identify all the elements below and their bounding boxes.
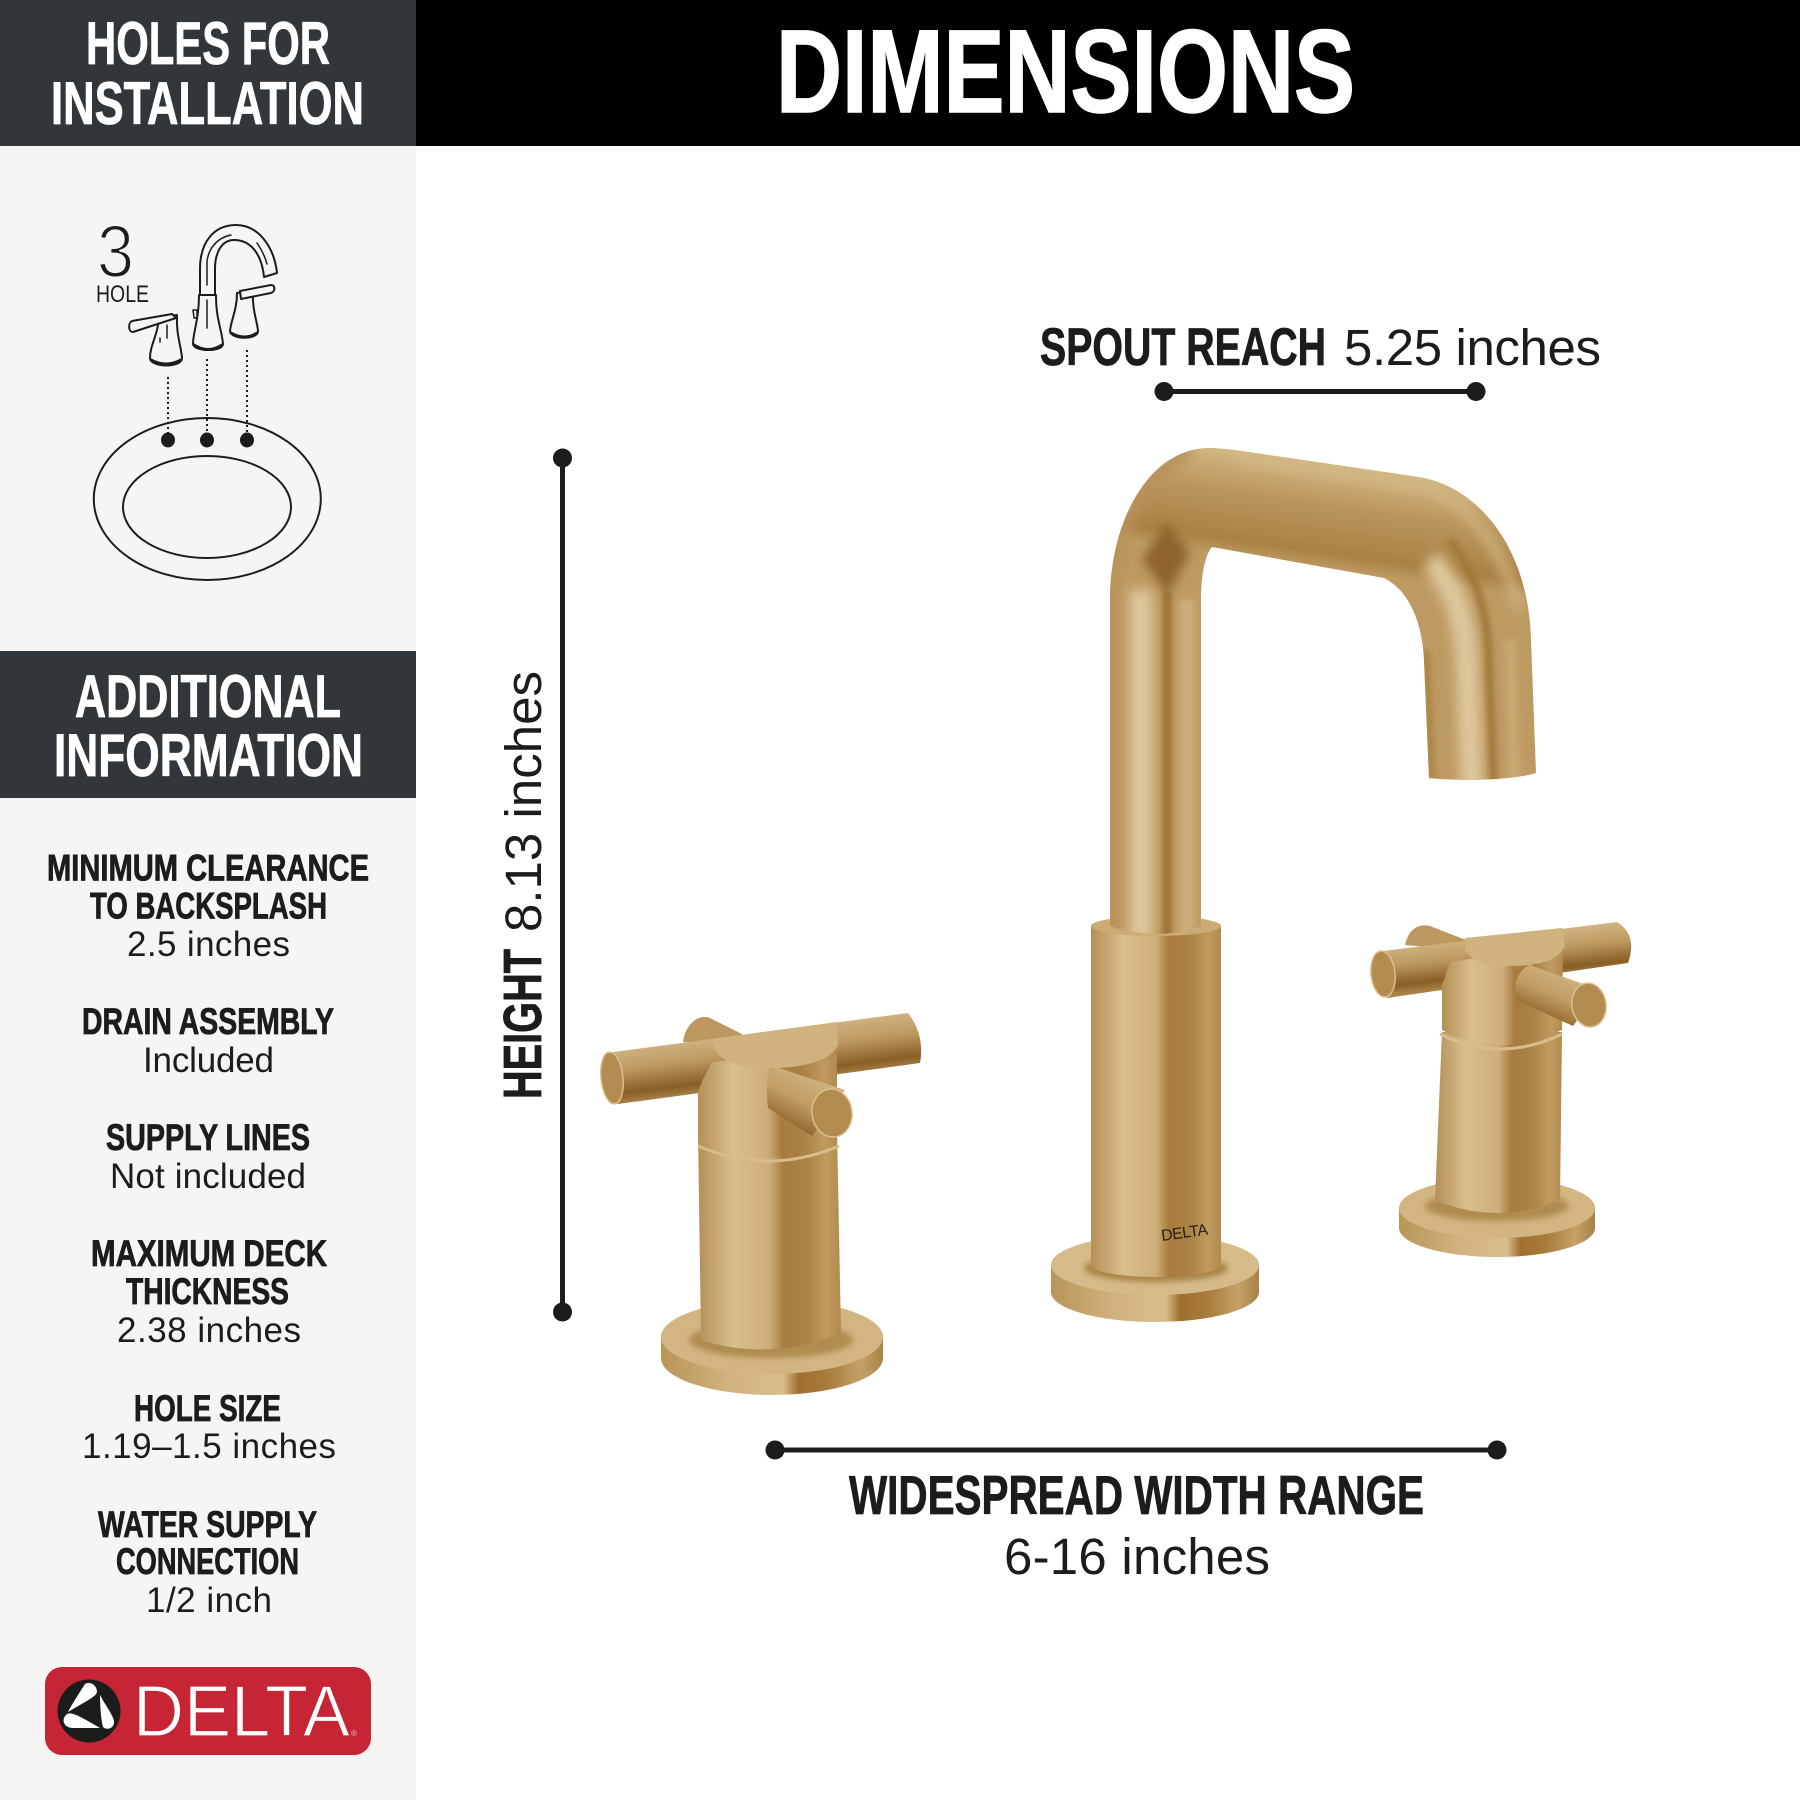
right handle front lever [1515, 965, 1609, 1029]
spec: hole size [82, 1388, 336, 1466]
dotted guides [168, 350, 247, 436]
left handle front lever [767, 1067, 855, 1140]
right handle cross bar [1369, 922, 1631, 998]
sidebar panel [0, 146, 416, 1800]
spec: water supply connection: CONNECTION [116, 1541, 299, 1582]
dimension: height: 8.13 inches [495, 671, 552, 932]
hole count label: 3 [97, 210, 134, 293]
right handle hub [1442, 945, 1563, 1045]
right handle stem [1435, 1032, 1562, 1213]
spec: maximum deck thickness: 2.38 inches [117, 1311, 301, 1350]
dimension: widespread width range: WIDESPREAD WIDTH RANGE [849, 1464, 1424, 1526]
spec: maximum deck thickness: MAXIMUM DECK [91, 1233, 327, 1274]
logo: delta: DELTA [133, 1672, 350, 1752]
spec: minimum clearance: 2.5 inches [127, 925, 290, 964]
faucet: left handle [598, 1013, 921, 1395]
spec: drain assembly: Included [143, 1041, 274, 1080]
spec: drain assembly: DRAIN ASSEMBLY [82, 1001, 334, 1042]
logo: delta [45, 1667, 371, 1755]
left handle cross bar [598, 1013, 921, 1105]
heading: holes for installation [0, 0, 416, 146]
heading: additional information: INFORMATION [54, 722, 363, 789]
spec: minimum clearance: MINIMUM CLEARANCE [47, 848, 369, 888]
spec: minimum clearance [47, 848, 369, 964]
spec: water supply connection [98, 1504, 317, 1620]
hole count label: HOLE [96, 281, 149, 308]
left handle top plate [712, 1022, 838, 1068]
dimension: spout reach: SPOUT REACH [1040, 318, 1326, 377]
faucet: right handle [1369, 922, 1631, 1257]
title banner: dimensions: DIMENSIONS [776, 6, 1355, 138]
right handle top plate [1465, 928, 1565, 966]
left handle stem [698, 1130, 841, 1349]
spout tube [1110, 448, 1536, 934]
center collar [1091, 916, 1221, 1277]
dimension: widespread width range: 6-16 inches [1004, 1528, 1270, 1585]
spec: supply lines [106, 1117, 310, 1196]
icon: three hole sink diagram [94, 210, 321, 580]
mounting holes [161, 432, 254, 448]
left handle seam [698, 1146, 839, 1161]
sink outline [94, 418, 321, 580]
dimension: height: HEIGHT [493, 949, 553, 1099]
spec: supply lines: Not included [110, 1157, 306, 1196]
spec: maximum deck thickness: THICKNESS [126, 1271, 289, 1312]
right handle rear stub [1405, 925, 1466, 950]
logo: delta: ® [351, 1729, 357, 1738]
spec: drain assembly [82, 1001, 334, 1080]
dimension: spout reach [1040, 318, 1601, 401]
spec: hole size: HOLE SIZE [134, 1388, 281, 1429]
dimension: height [493, 448, 572, 1322]
dimension: spout reach: 5.25 inches [1344, 319, 1601, 376]
spec: hole size: 1.19–1.5 inches [82, 1427, 336, 1466]
heading: additional information [0, 651, 416, 798]
left handle hub [698, 1050, 837, 1157]
left handle rear stub [683, 1017, 742, 1046]
spec: supply lines: SUPPLY LINES [106, 1117, 310, 1158]
spec: maximum deck thickness [91, 1233, 327, 1350]
right handle seam [1440, 1034, 1562, 1049]
title banner: dimensions [416, 0, 1800, 146]
left handle base [661, 1300, 883, 1395]
spec: minimum clearance: TO BACKSPLASH [90, 886, 327, 926]
faucet: center spout [1051, 440, 1550, 1322]
heading: holes for installation: INSTALLATION [51, 70, 364, 137]
hole count label [96, 210, 149, 308]
heading: holes for installation: HOLES FOR [86, 10, 330, 77]
heading: additional information: ADDITIONAL [75, 663, 341, 730]
right handle base [1399, 1178, 1595, 1257]
brand mark on collar: DELTA [1160, 1222, 1209, 1245]
spec: water supply connection: 1/2 inch [146, 1581, 272, 1620]
center base [1051, 1235, 1259, 1322]
dimension: widespread width range [766, 1440, 1506, 1585]
icon: line drawn faucet [129, 225, 277, 366]
spec: water supply connection: WATER SUPPLY [98, 1504, 317, 1545]
